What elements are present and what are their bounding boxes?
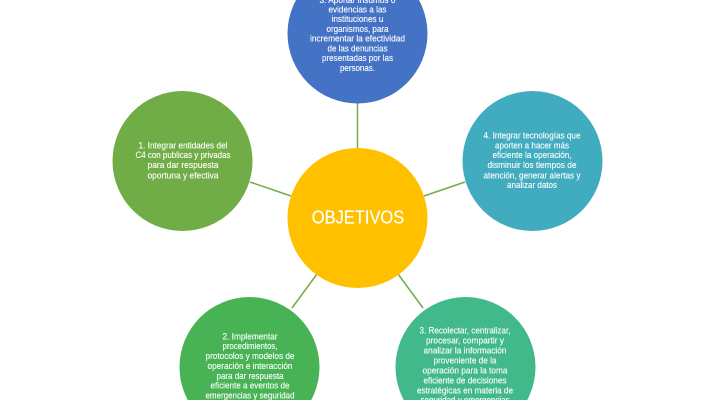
- panel: objective 1 left circle: [112, 91, 252, 231]
- text: objective top circle: incrementar la efectividad: [310, 34, 405, 44]
- text: objective top circle: personas.: [340, 63, 375, 73]
- text: objective bottom-right: 3. Recolectar, centralizar,: [420, 326, 510, 336]
- connector: centre to left circle: [250, 182, 291, 196]
- text: objective 2: 2. Implementar: [222, 332, 278, 342]
- text: objective 1: 1. Integrar entidades del: [138, 140, 228, 150]
- panel: objective 3 top circle: [288, 0, 428, 104]
- text: objective bottom-right: operación para la toma: [422, 366, 508, 376]
- panel: objective 3 bottom-right circle: [396, 297, 536, 400]
- text: objective bottom-right: analizar la información: [424, 345, 506, 355]
- panel: objective 2 bottom-left circle: [180, 297, 320, 400]
- text: objective bottom-right: [417, 326, 513, 400]
- connector: centre to bottom-left circle: [292, 274, 317, 308]
- text: objective 2: eficiente a eventos de: [210, 381, 290, 391]
- text: objective 4: 4. Integrar tecnologías que: [484, 131, 580, 141]
- text: objective 2: operación e interacción: [208, 361, 292, 371]
- text: objective 1: C4 con publicas y privadas: [136, 150, 231, 160]
- text: objective top circle: instituciones u: [332, 14, 384, 24]
- text: objective 4: aporten a hacer más: [495, 140, 569, 150]
- panel: objective 4 right circle: [462, 91, 602, 231]
- text: objective 4: analizar datos: [507, 180, 557, 190]
- text: objective 1: oportuna y efectiva: [148, 170, 219, 180]
- text: objective top circle: organismos, para: [326, 24, 389, 34]
- text: objective 1: [136, 140, 231, 180]
- text: objective 4: [484, 131, 581, 190]
- text: objective 2: protocolos y modelos de: [206, 351, 294, 361]
- connector: centre to right circle: [424, 182, 465, 196]
- text: objective 4: disminuir los tiempos de: [488, 160, 576, 170]
- panel: centre circle: [288, 148, 428, 288]
- text: objective bottom-right: estratégicas en materia de: [417, 385, 513, 395]
- text: objective 2: para dar respuesta: [216, 371, 284, 381]
- text: objective top circle: de las denuncias: [328, 43, 388, 53]
- text: objective 4: eficiente la operación,: [492, 150, 572, 160]
- title: OBJETIVOS: OBJETIVOS: [312, 207, 404, 228]
- text: objective top circle: evidencias a las: [328, 4, 387, 14]
- text: objective top circle: presentadas por las: [322, 53, 393, 63]
- text: objective bottom-right: proveniente de la: [434, 356, 497, 366]
- connector: centre to top circle: [356, 103, 358, 148]
- text: objective 4: atención, generar alertas y: [484, 170, 581, 180]
- text: objective 2: [206, 332, 294, 400]
- connector: centre to bottom-right circle: [398, 274, 423, 308]
- text: objective bottom-right: eficiente de decisiones: [424, 375, 507, 385]
- text: objective bottom-right: procesar, compartir y: [426, 336, 504, 346]
- text: objective 1: para dar respuesta: [148, 160, 219, 170]
- text: objective top circle: [310, 0, 405, 73]
- text: objective 2: procedimientos,: [222, 341, 278, 351]
